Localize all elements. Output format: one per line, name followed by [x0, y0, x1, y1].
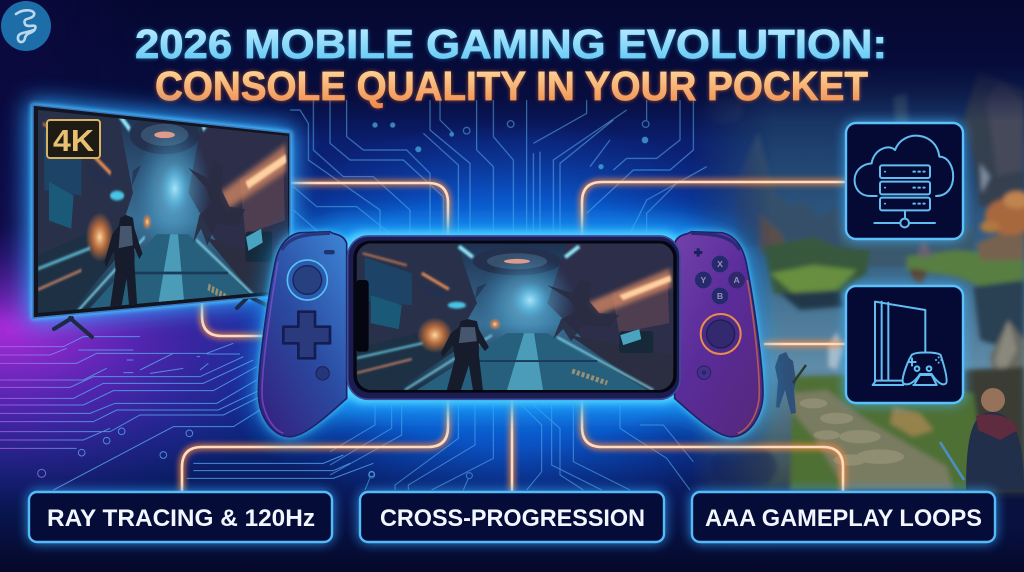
- handheld controller with phone: [258, 223, 763, 437]
- phone screen: [353, 241, 677, 393]
- phone notch: [356, 280, 369, 352]
- TV stand: [54, 297, 268, 337]
- label: cross-progression: CROSS-PROGRESSION: [380, 505, 645, 532]
- right grip: X: [717, 259, 723, 269]
- fantasy landscape backdrop: [703, 73, 1024, 524]
- connector: ray tracing: [182, 396, 448, 492]
- game console icon box: [845, 285, 964, 404]
- label: AAA gameplay loops: AAA GAMEPLAY LOOPS: [705, 505, 982, 532]
- decorative circuit traces: bottom centre: [330, 405, 693, 490]
- decorative circuit traces: top centre: [290, 100, 707, 233]
- logo badge: [1, 1, 51, 51]
- label: ray tracing: [28, 491, 333, 543]
- right grip: A: [734, 275, 741, 285]
- connector: TV to phone: [292, 183, 448, 238]
- title: CONSOLE QUALITY IN YOUR POCKET: [155, 63, 868, 109]
- title: 2026 MOBILE GAMING EVOLUTION:: [135, 21, 887, 67]
- TV screen: [38, 110, 288, 313]
- right grip: Y: [700, 275, 706, 285]
- right grip: [675, 232, 763, 437]
- connector lines: [182, 182, 845, 492]
- left grip: [258, 232, 347, 437]
- warrior figure: [775, 352, 806, 414]
- cloud server icon box: [845, 122, 964, 240]
- connector: console to controller: [765, 343, 845, 345]
- title: 2026 MOBILE GAMING EVOLUTION:: [135, 21, 887, 67]
- controller outer glow: [258, 223, 763, 437]
- decorative circuit traces: lower left: [0, 337, 374, 490]
- title: CONSOLE QUALITY IN YOUR POCKET: [155, 63, 868, 109]
- 4K badge: [47, 120, 100, 158]
- connector: cross-progression: [511, 396, 513, 492]
- phone frame: [348, 236, 680, 399]
- TV with game scene: [28, 100, 295, 337]
- 4K badge: 4K: [53, 123, 95, 158]
- label: cross-progression: [359, 491, 665, 543]
- hero figure: [940, 388, 1024, 490]
- TV frame: [33, 105, 290, 318]
- label: AAA gameplay loops: [691, 491, 996, 543]
- connector: AAA gameplay: [582, 396, 843, 492]
- connector: cloud to phone: [582, 182, 845, 238]
- connector: TV base to controller: [202, 300, 262, 336]
- label: ray tracing: RAY TRACING & 120Hz: [47, 505, 315, 532]
- title: [135, 21, 887, 109]
- controller inner glow: [258, 232, 763, 437]
- right grip: B: [717, 291, 723, 301]
